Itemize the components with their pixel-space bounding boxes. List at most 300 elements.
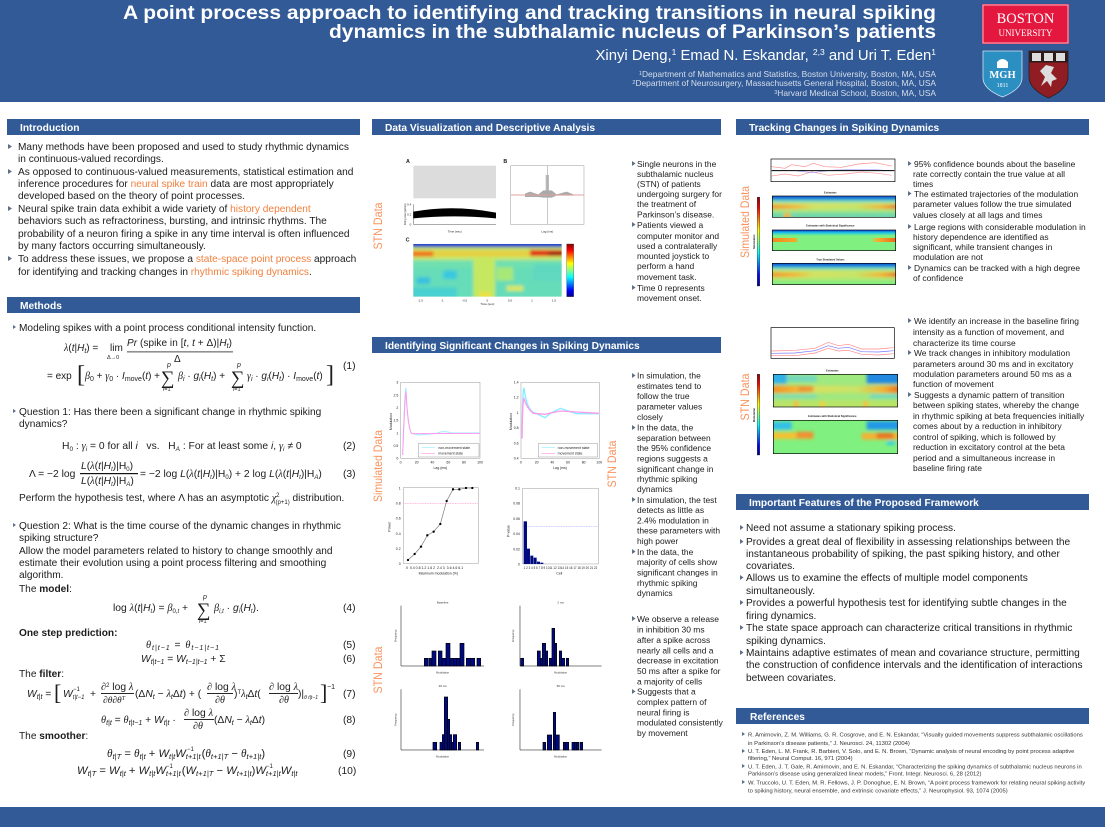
equation 6: t|t−1	[151, 659, 165, 666]
equation 8: ∂ log λ	[184, 708, 214, 719]
chart: C heat map: -1.5	[418, 299, 423, 303]
equation 8: ∂θ	[193, 721, 203, 732]
text block: data visualization bullets: Single neurons in the	[637, 159, 717, 169]
text: modeling spikes: Modeling spikes with a point process conditional intensity function.	[19, 323, 316, 334]
equation 9	[107, 747, 356, 761]
chart: power curve	[388, 486, 478, 575]
equation 7: ∂θ∂θ	[103, 696, 122, 706]
text block: features bullets: Maintains adaptive estimates of mean and covariance structure, permitting	[746, 648, 1080, 659]
equation 7: W	[27, 689, 38, 700]
equation 3: 0	[225, 475, 229, 481]
text block: introduction bullets: Neural spike train data exhibit a wide variety of history dependent	[18, 204, 311, 215]
text: question 2: algorithm.	[19, 570, 63, 581]
equation 7: 2	[106, 683, 110, 689]
text block: simulation and data bullets: the 95% confidence	[637, 443, 711, 453]
equation 1: ∑	[161, 368, 175, 389]
equation 10: t+1|t	[166, 769, 182, 778]
equation 4: +	[179, 603, 188, 614]
equation 1: = exp	[47, 371, 72, 382]
chart: power curve: 1	[399, 486, 401, 490]
chart: simulated modulation curve: 1	[396, 431, 398, 435]
equation 8: (ΔN	[214, 715, 232, 726]
chart: simulated modulation curve: 40	[430, 461, 434, 465]
authors: 1	[672, 47, 677, 57]
chart: STN modulation curve	[509, 381, 602, 470]
equation 3: L(λ(t|H	[269, 469, 299, 480]
text block: simulation and data bullets	[632, 370, 720, 598]
chart: STN tracking panels	[752, 328, 904, 455]
equation 8: t|t	[106, 720, 113, 727]
chart: C heat map: Time (sec)	[480, 302, 494, 306]
text: question 1: dynamics?	[19, 419, 68, 430]
text block: simulated tracking bullets: times	[913, 179, 933, 189]
equation 6	[141, 654, 356, 666]
equation 3: A	[125, 482, 130, 488]
text block: introduction bullets: behaviors such as refractoriness, bursting, and intrinsic rhythms. The	[18, 216, 327, 227]
equation 8: W	[154, 715, 165, 726]
equation 1: t	[279, 376, 282, 383]
text block: introduction bullets: inference procedures for neural spike train data are most appropriately	[18, 179, 335, 190]
text block: reference list: R. Amirnovin, Z. M. Williams, G. R. Cosgrove, and E. N. Eskandar, “Visually guided movements suppress subthalamic oscillations	[748, 732, 1083, 738]
equation 10: −	[213, 765, 226, 777]
logo: MGH shield: MGH	[989, 70, 1016, 81]
equation 1: t	[84, 348, 87, 355]
text block: data visualization bullets: the treatment of	[637, 199, 697, 209]
equation 7: =	[42, 689, 51, 700]
affiliations	[632, 69, 936, 98]
heading: Data Visualization and Descriptive Analysis: Data Visualization and Descriptive Analysis	[385, 123, 595, 134]
chart: A raster and rate: A	[406, 159, 410, 165]
equation 7: t	[246, 694, 249, 701]
equation 2: i vs. H	[136, 441, 176, 452]
chart: STN modulation curve: 40	[550, 461, 554, 465]
equation 7: θ t|t−1	[304, 695, 318, 701]
equation 1: t) +	[145, 371, 160, 382]
equation 7: t	[171, 694, 174, 701]
equation 1: γ	[105, 371, 110, 382]
chart: STN modulation curve: movement state	[558, 452, 582, 456]
chart: C heat map	[406, 237, 574, 306]
equation 7: ∂θ	[279, 695, 289, 706]
equation 10: =	[96, 765, 109, 777]
equation 1: i	[183, 376, 185, 383]
equation 10: W	[255, 765, 267, 777]
equation 1: I	[122, 371, 125, 382]
chart: C heat map: 0.5	[508, 299, 512, 303]
equation 9: )	[261, 748, 265, 760]
text block: data visualization bullets: perform a hand	[637, 261, 695, 271]
chart: power curve: 0 0.4 0.8 1.2 1.6 2 2.4 3 3.6 4.6 6.1	[406, 566, 463, 570]
text block: simulated tracking bullets: Large regions with considerable modulation in	[914, 222, 1086, 232]
equation 3: t	[111, 482, 113, 488]
equation 1: 0	[90, 376, 94, 383]
heading: Introduction	[7, 119, 360, 135]
chart: B autocorrelation: B	[503, 159, 507, 165]
panel: Tracking Changes	[736, 119, 1089, 473]
chart: power curve: 0	[399, 562, 401, 566]
text: the smoother: The smoother:	[19, 731, 88, 742]
title	[123, 2, 936, 43]
text block: features bullets: The state space approach can characterize critical transitions in rhythmic	[746, 623, 1072, 634]
chart: STN modulation curve: 100	[596, 461, 602, 465]
equation 4: i	[239, 609, 241, 615]
equation 1: H	[272, 371, 280, 382]
equation 3: L(λ(t|H	[81, 461, 111, 472]
equation 1: g	[193, 371, 199, 382]
text block: data visualization bullets: (STN) of patients	[637, 179, 701, 189]
text block: features bullets: spiking dynamics.	[746, 636, 826, 647]
chart: simulated modulation curve: 60	[446, 461, 450, 465]
chart: STN modulation curve: 0	[520, 461, 522, 465]
heading: References: References	[750, 712, 805, 723]
equation 9: t|t	[169, 752, 176, 761]
equation 9: W	[158, 748, 170, 760]
equation 3: 0	[126, 467, 130, 473]
chart: simulated modulation curve: 80	[462, 461, 466, 465]
equation 8: =	[112, 715, 124, 726]
text block: STN tracking bullets	[908, 316, 1085, 473]
text block: simulated tracking bullets: history dependence are identified as	[913, 232, 1049, 242]
label: STN Data right: STN Data	[605, 440, 619, 488]
text block: inhibition bullets: after a spike across	[637, 635, 710, 645]
affiliations: Department of Neurosurgery, Massachusetts General Hospital, Boston, MA, USA	[635, 78, 936, 88]
chart: C heat map: -1	[441, 299, 444, 303]
text block: introduction bullets: developed based on the theory of point processes.	[18, 191, 245, 202]
text block: data visualization bullets: used a contralaterally	[637, 241, 718, 251]
text block: simulated tracking bullets	[908, 159, 1086, 283]
text block: features bullets: instantaneous probability of spiking, the past spiking history, and other	[746, 549, 1061, 560]
equation 3: ) + 2 log	[229, 469, 269, 480]
equation 7: Δ	[248, 689, 255, 700]
chart: p-value bars: 0.1	[515, 487, 520, 491]
equation 8	[101, 708, 356, 732]
equation 1	[47, 338, 356, 393]
chart: p-value bars: 0	[518, 562, 520, 566]
equation 10: t+1|t	[237, 769, 252, 778]
chart: p-value bars: Cell	[556, 571, 563, 575]
heading: Introduction: Introduction	[20, 123, 79, 134]
authors: 1	[931, 47, 936, 57]
chart: simulated tracking panels: Modulation	[752, 234, 756, 249]
equation 10: W	[281, 765, 293, 777]
equation 4: g	[233, 603, 239, 614]
chart: STN tracking panels: Estimates	[826, 368, 839, 372]
equation 3: )	[130, 476, 134, 487]
equation 8: t	[232, 720, 235, 727]
text block: reference list	[742, 732, 1085, 794]
text block: data visualization bullets: movement onset.	[637, 293, 702, 303]
equation 7: λ	[128, 682, 134, 693]
authors: Emad N. Eskandar,	[676, 48, 813, 64]
chart: STN modulation curve: non-movement state	[558, 446, 589, 450]
footer band	[0, 807, 1105, 827]
text block: STN tracking bullets: We track changes in inhibitory modulation	[914, 348, 1070, 358]
text block: inhibition bullets: neural firing is	[637, 707, 690, 717]
chart: A raster and rate	[403, 159, 496, 233]
affiliations: Department of Mathematics and Statistics, Boston University, Boston, MA, USA	[642, 69, 936, 79]
chart: B autocorrelation	[503, 159, 584, 233]
equation 6: =	[164, 654, 176, 665]
text block: reference list: Parkinson’s disease using generalized linear models,” Front. Integr. Neurosci. 6, 28 (2012)	[748, 772, 981, 778]
text block: simulation and data bullets: significant change in	[637, 464, 714, 474]
chart: C heat map: C	[406, 238, 410, 244]
text block: inhibition bullets: complex pattern of	[637, 697, 707, 707]
text block: introduction bullets: by many factors occurring simultaneously.	[18, 241, 206, 252]
text block: simulation and data bullets: high power	[637, 536, 678, 546]
equation 1: i=1	[163, 387, 171, 393]
text block: introduction bullets: To address these issues, we propose a state-space point process approach	[18, 254, 356, 265]
chart: STN modulation curve: 60	[566, 461, 570, 465]
equation 7: t) + (	[180, 689, 201, 700]
equation 9: +	[146, 748, 158, 760]
text block: features bullets: between covariates.	[746, 673, 836, 684]
text block: inhibition bullets: nearly all cells and a	[637, 645, 714, 655]
text block: STN tracking bullets: We identify an increase in the baseline firing	[914, 316, 1079, 326]
equation 8: t	[250, 720, 253, 727]
panel: References	[736, 708, 1089, 794]
text block: reference list: U. T. Eden, J. T. Gale, R. Amirnovin, and E. N. Eskandar, “Characterizing the spiking dynamics of subthalamic nucleus neurons in	[748, 764, 1082, 770]
text block: reference list: in Parkinson’s disease patients,” J. Neurosci. 24, 11302 (2004)	[748, 741, 910, 747]
equation 10: −1	[266, 764, 274, 770]
equation 2: = 0 for all	[87, 441, 136, 452]
text block: inhibition bullets: 50 ms after a spike for	[637, 666, 721, 676]
heading: Data Visualization and Descriptive Analysis	[372, 119, 721, 135]
text block: inhibition bullets: decrease in excitation	[637, 656, 719, 666]
equation 4: log λ(t|H	[113, 603, 151, 614]
equation 4: (	[240, 603, 244, 614]
equation 10: W	[77, 765, 89, 777]
text: the filter: The filter:	[19, 669, 64, 680]
chart: p-value bars: 1 2 3 4 5 6 7 8 9 1011 12 1314 15 16 17 18 19 20 21 22	[524, 566, 597, 570]
text block: features bullets: Allows us to examine the effects of multiple model components	[746, 573, 1028, 584]
text block: data visualization bullets: subthalamic nucleus	[637, 169, 713, 179]
chart: p-value bars	[506, 487, 598, 575]
chart: histogram 30 ms: Frequency	[393, 713, 397, 726]
chart: histogram baseline: Modulation	[436, 670, 450, 674]
text block: reference list: U. T. Eden, L. M. Frank, R. Barbieri, V. Solo, and E. N. Brown, “Dynamic analysis of neural encoding by point process adaptive	[748, 749, 1074, 755]
text block: introduction bullets: probability of a neuron firing a spike in any time interval is often influenced	[18, 229, 350, 240]
equation 3: t	[299, 475, 301, 481]
chart: simulated modulation curve: 2.5	[393, 394, 398, 398]
equation 7: [	[54, 680, 61, 705]
chart: simulated modulation curve: 0.5	[393, 444, 398, 448]
equation 4: ).	[253, 603, 259, 614]
equation 10: +	[126, 765, 139, 777]
text block: inhibition bullets: We observe a release	[637, 614, 719, 624]
chart: simulated modulation curve: 3	[396, 381, 398, 385]
equation 10	[77, 764, 356, 778]
affiliations: 1	[639, 71, 642, 77]
equation 8: t)	[259, 715, 265, 726]
text block: simulation and data bullets: significant changes in	[637, 568, 718, 578]
equation 2: :	[73, 441, 82, 452]
equation 1: i	[267, 376, 269, 383]
equation 10: W	[226, 765, 238, 777]
text block: reference list: W. Truccolo, U. T. Eden, M. R. Fellows, J. P. Donoghue, E. N. Brown, “A point process framework for relating neural spiking activity	[748, 780, 1085, 786]
equation 6: t−1|t−1	[186, 659, 208, 666]
equation 3: )	[318, 469, 322, 480]
equation 1: ) ·	[281, 371, 293, 382]
text block: simulation and data bullets: dynamics	[637, 588, 673, 598]
chart: simulated tracking panels: Estimates	[824, 190, 837, 194]
text block: simulated tracking bullets: Dynamics can be tracked with a high degree	[914, 263, 1080, 273]
equation 4: β	[166, 603, 173, 614]
text block: features bullets: firing dynamics.	[746, 611, 816, 622]
text block: simulated tracking bullets: significant, while transient changes in	[913, 242, 1053, 252]
logo: Harvard shield	[1029, 51, 1068, 98]
equation 2: A	[175, 446, 180, 453]
label: STN Data: STN Data	[371, 202, 385, 250]
chart: histogram 2 ms	[511, 600, 602, 674]
text: question 2: The model:	[19, 584, 72, 595]
heading: Identifying Significant Changes in Spiking Dynamics: Identifying Significant Changes in Spiking Dynamics	[385, 341, 640, 352]
equation 4: i,t	[219, 609, 224, 615]
chart: histogram baseline: Frequency	[393, 629, 397, 642]
chart: A raster and rate: 0	[410, 223, 412, 227]
chart: histogram 50 ms: 50 ms	[557, 684, 565, 688]
chart: A raster and rate: Time (sec)	[448, 229, 462, 233]
equation 7: ∂ log λ	[269, 682, 299, 693]
heading: Important Features of the Proposed Framework	[736, 494, 1089, 510]
equation 10: t|t	[149, 769, 156, 778]
chart: p-value bars: P-value	[506, 525, 510, 537]
chart: simulated modulation curve: 0	[400, 461, 402, 465]
equation 1: lim	[110, 343, 123, 354]
equation 5: =	[171, 640, 184, 651]
logo: Boston University: BOSTON	[997, 11, 1055, 27]
logo: MGH shield: 1811	[997, 83, 1008, 89]
label: Simulated Data: Simulated Data	[371, 430, 385, 502]
equation 3: )|H	[113, 476, 126, 487]
equation 7: λ	[240, 689, 246, 700]
chart: histogram 50 ms	[511, 684, 602, 758]
equation 1: Δ	[174, 354, 181, 365]
equation 1: (	[313, 371, 317, 382]
equation 1: ) +	[213, 371, 225, 382]
equation 1: γ	[247, 371, 252, 382]
text: hypothesis test: 2	[276, 493, 280, 499]
equation 10: )	[252, 765, 256, 777]
chart: A raster and rate: 0.4	[407, 203, 412, 207]
equation 7: ∂ log λ	[207, 682, 237, 693]
equation 4: H	[243, 603, 251, 614]
text block: STN tracking bullets: reduction in excitatory control at the beta	[913, 442, 1065, 452]
equation 7: t|t	[37, 694, 43, 701]
chart: STN tracking panels: Modulation	[752, 408, 756, 422]
chart: STN modulation curve: 0.4	[514, 457, 519, 461]
authors: 2,3	[813, 47, 825, 57]
equation 2: 0	[69, 446, 73, 453]
title: A point process approach to identifying and tracking transitions in neural spiking	[123, 2, 936, 24]
equation 1: ∑	[231, 368, 245, 389]
equation 4: ∑	[197, 600, 211, 621]
text block: introduction bullets: in continuous-valued recordings.	[18, 154, 164, 165]
text block: simulated tracking bullets: rate correctly contain the true value at all	[913, 169, 1065, 179]
chart: simulated modulation curve: movement state	[438, 452, 463, 456]
chart: histogram 50 ms: Frequency	[511, 713, 515, 726]
text block: simulated tracking bullets: 95% confidence bounds about the baseline	[914, 159, 1076, 169]
text block: introduction bullets	[8, 142, 356, 278]
equation 7: )|	[298, 689, 304, 700]
chart: p-value bars: 0.08	[513, 502, 520, 506]
equation 1: ·	[253, 371, 261, 382]
panel: Identifying Significant Changes	[371, 337, 724, 758]
chart: simulated modulation curve: Modulation	[389, 413, 393, 430]
equation 5: θ	[185, 640, 190, 651]
text block: simulation and data bullets: parameter values	[637, 402, 702, 412]
equation 2: ≠ 0	[284, 441, 302, 452]
equation 4: t	[251, 609, 253, 615]
label: STN Data: STN Data	[738, 373, 752, 420]
chart: B autocorrelation: Lag (ms)	[541, 229, 553, 233]
equation 1: ]	[326, 362, 334, 388]
equation 9: θ	[241, 748, 247, 760]
text block: inhibition bullets	[632, 614, 724, 738]
text block: simulation and data bullets: In the data, the	[637, 547, 694, 557]
chart: p-value bars: 0.02	[513, 547, 520, 551]
text block: introduction bullets: Many methods have been proposed and used to study rhythmic dynamics	[18, 142, 349, 153]
label: Simulated Data: Simulated Data	[738, 186, 752, 258]
chart: power curve: Maximum modulation (%)	[419, 571, 458, 575]
authors: Xinyi Deng,	[595, 48, 672, 64]
equation 1: p	[166, 362, 171, 369]
equation 7: +	[90, 689, 96, 700]
chart: C heat map: 0	[486, 299, 488, 303]
chart: simulated tracking panels: True Simulated Values	[816, 257, 845, 261]
text block: simulation and data bullets: 2.4% modulation in	[637, 516, 709, 526]
chart: A raster and rate: Firing rate (sp/ms)	[403, 203, 407, 225]
text block: features bullets	[740, 523, 1083, 684]
equation 3	[29, 461, 356, 488]
equation 3: (3)	[343, 469, 356, 480]
text block: inhibition bullets: Suggests that a	[637, 687, 696, 697]
equation 4: β	[213, 603, 220, 614]
equation 1: move	[125, 376, 142, 383]
chart: STN modulation curve: 0.6	[514, 441, 519, 445]
equation 3: t	[210, 475, 212, 481]
text block: introduction bullets: As opposed to continuous-valued measurements, statistical estimation and	[18, 167, 353, 178]
equation 1: i=1	[233, 387, 241, 393]
equation 1: Pr (spike in [t, t + Δ)|H	[127, 338, 227, 349]
equation 8: Δ	[252, 715, 259, 726]
text: question 2: Allow the model parameters related to history to change smoothly and	[19, 546, 332, 557]
chart: simulated tracking panels	[752, 159, 902, 286]
text: question 1: Question 1: Has there been a significant change in rhythmic spiking	[19, 407, 321, 418]
label: STN Data bottom: STN Data	[371, 646, 385, 694]
equation 4: ) =	[152, 603, 167, 614]
chart: histogram 30 ms: 30 ms	[439, 684, 447, 688]
equation 8: λ	[244, 715, 250, 726]
equation 7: t	[153, 694, 156, 701]
equation 1: i	[199, 376, 201, 383]
panel: Introduction	[7, 119, 360, 278]
text block: data visualization bullets: Parkinson’s disease.	[637, 210, 714, 220]
equation 3: Λ = −2 log	[29, 469, 76, 480]
equation 10: W	[185, 765, 197, 777]
equation 1: H	[204, 371, 212, 382]
chart: histogram 2 ms: Frequency	[511, 629, 515, 642]
equation 8: +	[142, 715, 154, 726]
text block: simulated tracking bullets: modulation are not	[913, 252, 984, 262]
chart: C heat map: -0.5	[462, 299, 468, 303]
equation 8: θ	[101, 715, 106, 726]
text block: simulation and data bullets: rhythmic spiking	[637, 474, 698, 484]
text block: STN tracking bullets: characterize its time course	[913, 338, 1016, 348]
chart: power curve: Power	[388, 521, 392, 532]
equation 1: i	[251, 376, 253, 383]
equation 10: t|t	[291, 769, 298, 778]
equation 7: W	[63, 689, 74, 700]
